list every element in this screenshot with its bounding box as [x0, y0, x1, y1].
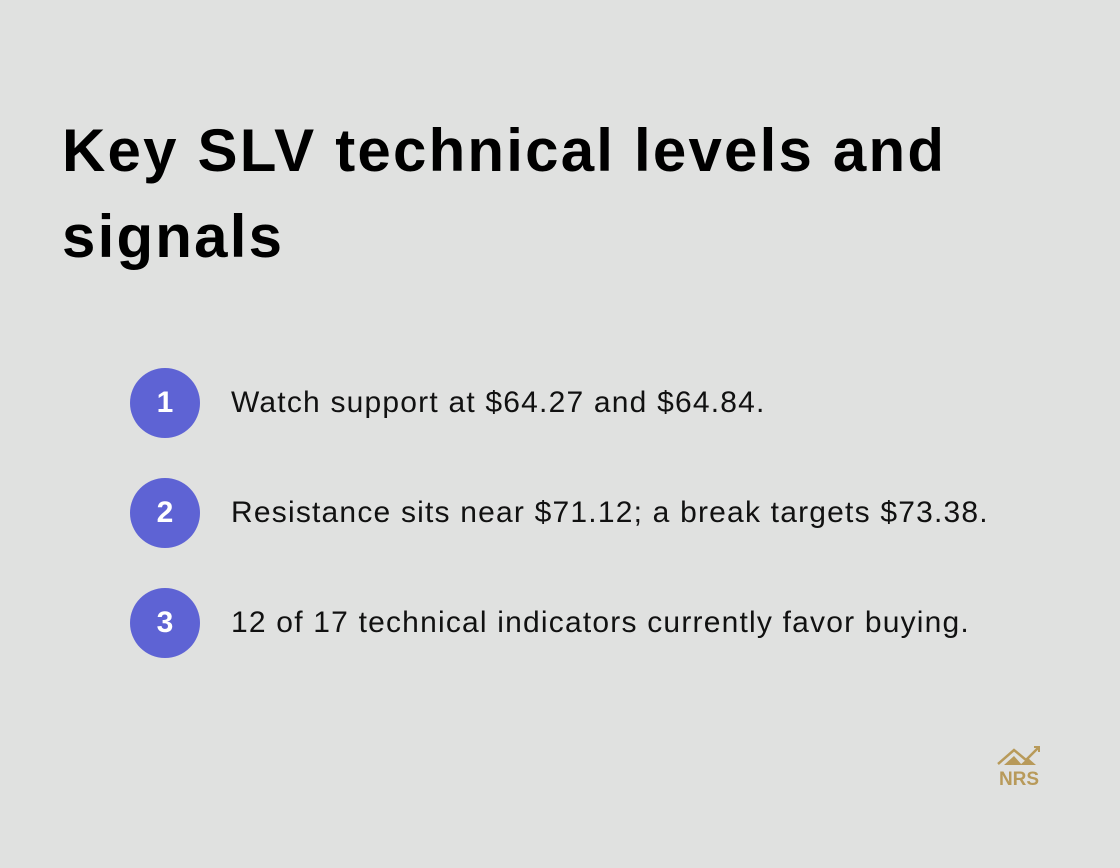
logo: NRS: NRS	[999, 769, 1039, 790]
item 3	[130, 588, 970, 658]
title	[62, 117, 946, 270]
badge 2: 2	[157, 496, 173, 529]
item 1	[130, 368, 766, 438]
badge 1	[130, 368, 200, 438]
badge 1: 1	[157, 386, 173, 419]
badge 3: 3	[157, 606, 173, 639]
item 2	[130, 478, 989, 548]
title: signals	[62, 203, 284, 270]
logo: NRS	[997, 746, 1040, 790]
badge 3	[130, 588, 200, 658]
text 3: 12 of 17 technical indicators currently favor buying.	[231, 606, 970, 639]
title: Key SLV technical levels and	[62, 117, 946, 184]
badge 2	[130, 478, 200, 548]
text 1: Watch support at $64.27 and $64.84.	[231, 386, 766, 419]
text 2: Resistance sits near $71.12; a break targets $73.38.	[231, 496, 989, 529]
